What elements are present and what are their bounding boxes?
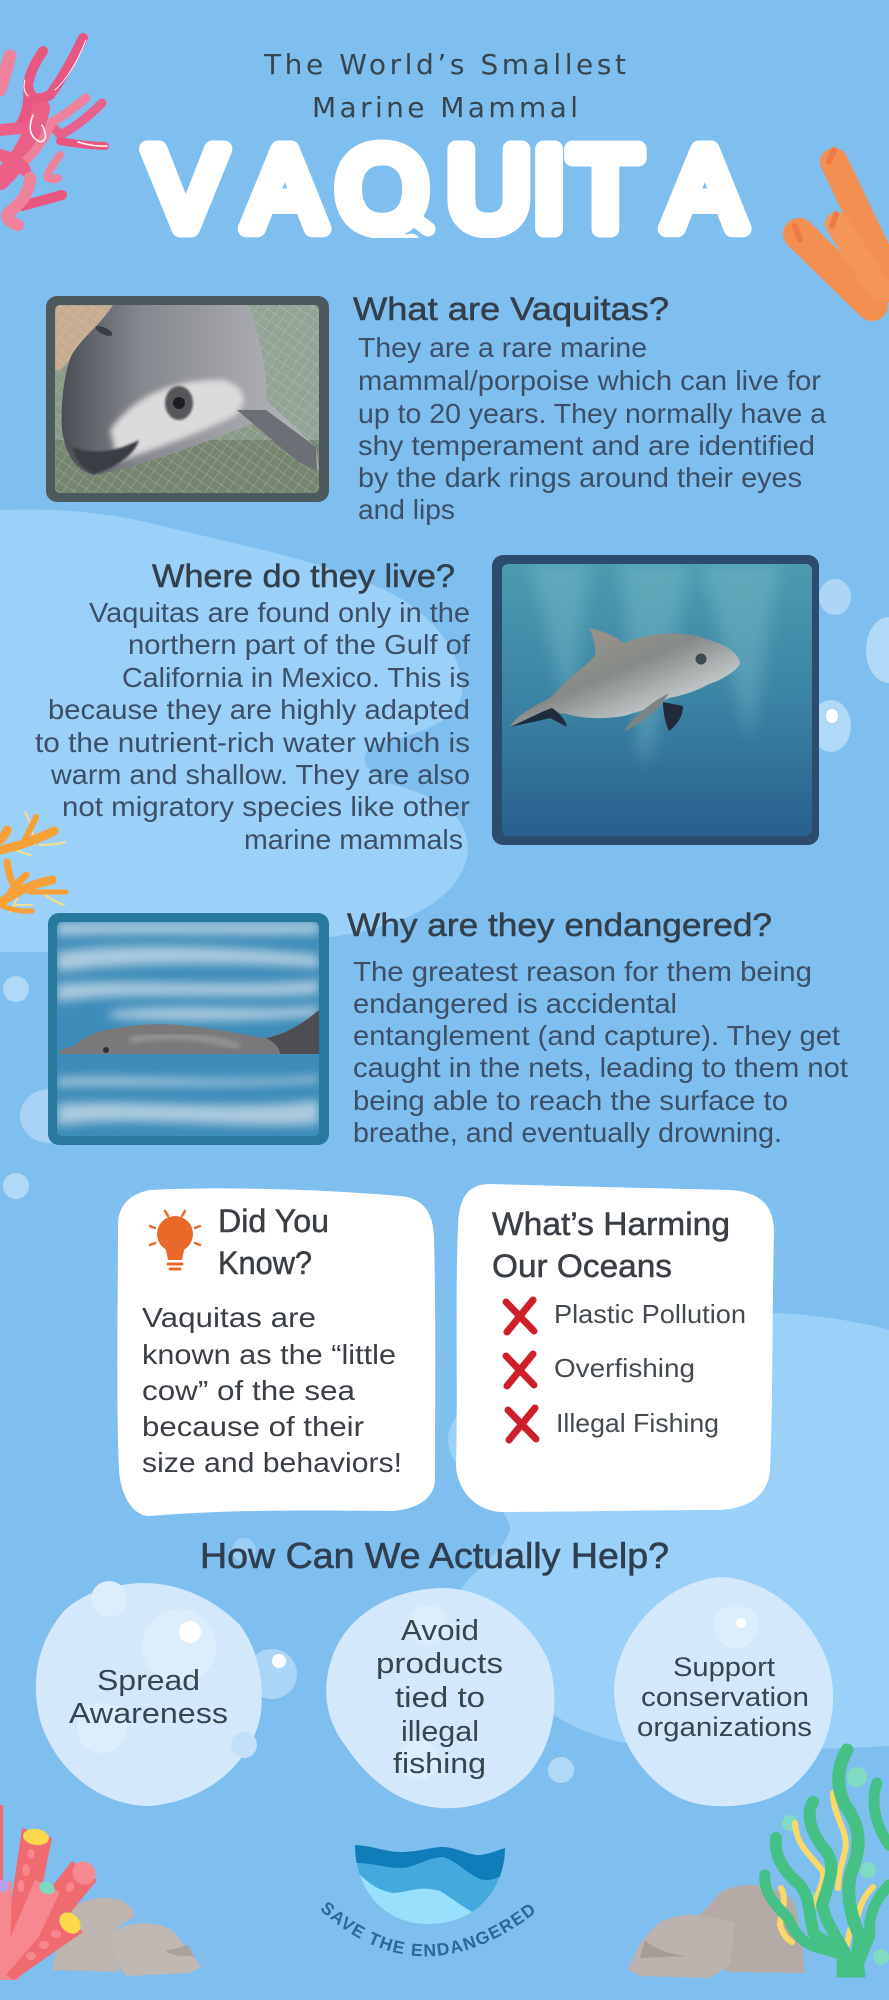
label: products (376, 1648, 503, 1680)
title: The World's Smallest Marine Mammal: Marine Mammal (312, 91, 578, 124)
text: why endangered body: breathe, and eventually drowning. (353, 1117, 782, 1148)
text: little cow fact: Vaquitas are (142, 1302, 316, 1333)
photo: vaquita swimming underwater (492, 555, 819, 845)
list item: Overfishing (506, 1353, 695, 1386)
text: little cow fact: because of their (142, 1411, 364, 1442)
text: why endangered body (353, 956, 848, 1148)
title: The World's Smallest Marine Mammal (263, 48, 626, 124)
circle: Spread Awareness (36, 1581, 262, 1806)
list item: Overfishing: Overfishing (554, 1353, 695, 1383)
text: where do they live body: to the nutrient-rich water which is (35, 727, 470, 758)
text: what are vaquitas body: shy temperament and are identified (358, 430, 815, 461)
photo: vaquita at water surface (48, 913, 329, 1145)
text: why endangered body: caught in the nets, leading to them not (353, 1052, 848, 1083)
label (376, 1615, 503, 1780)
coral: pink top left (0, 38, 107, 225)
text: what are vaquitas body: by the dark rings around their eyes (358, 462, 802, 493)
heading: How Can We Actually Help?: How Can We Actually Help? (200, 1535, 669, 1576)
circle: Support conservation organizations (614, 1577, 833, 1806)
text: where do they live body: northern part of the Gulf of (128, 629, 470, 660)
logo: save the endangered (322, 1845, 534, 1956)
text: where do they live body: not migratory species like other (62, 791, 470, 822)
text: what are vaquitas body: and lips (358, 494, 455, 525)
heading: Did You Know? (218, 1203, 329, 1281)
coral: red bottom left (0, 1805, 100, 1980)
label: Avoid (401, 1615, 479, 1647)
label: Awareness (69, 1698, 228, 1730)
label: Support (673, 1652, 776, 1682)
heading: What's Harming Our Oceans: Our Oceans (492, 1248, 672, 1284)
icon: light bulb (150, 1211, 200, 1269)
heading: What's Harming Our Oceans: What’s Harming (492, 1206, 730, 1242)
heading: Did You Know?: Did You (218, 1203, 329, 1239)
decorative bubbles (3, 579, 889, 1783)
label: Spread (97, 1665, 200, 1697)
list item: Illegal Fishing: Illegal Fishing (556, 1408, 719, 1438)
heading: Why are they endangered?: Why are they endangered? (347, 907, 772, 943)
text: where do they live body: marine mammals (244, 824, 463, 855)
label: illegal (401, 1716, 479, 1748)
title: The World's Smallest Marine Mammal: The World’s Smallest (263, 48, 626, 81)
text: where do they live body (35, 597, 470, 855)
text: little cow fact: size and behaviors! (142, 1447, 402, 1478)
seaweed: bottom right (765, 1750, 889, 1976)
heading: What's Harming Our Oceans (492, 1206, 730, 1284)
list item: Plastic Pollution (506, 1299, 746, 1332)
heading: What are Vaquitas?: What are Vaquitas? (353, 291, 669, 327)
label: fishing (393, 1748, 486, 1780)
circle: Avoid products tied to illegal fishing (326, 1588, 554, 1808)
text: why endangered body: entanglement (and capture). They get (353, 1020, 840, 1051)
text: little cow fact (142, 1302, 402, 1478)
text: why endangered body: The greatest reason for them being (353, 956, 812, 987)
text: where do they live body: California in Mexico. This is (122, 662, 470, 693)
text: why endangered body: endangered is accidental (353, 988, 677, 1019)
text: what are vaquitas body: They are a rare marine (358, 332, 647, 363)
text: little cow fact: known as the “little (142, 1339, 396, 1370)
text: where do they live body: Vaquitas are found only in the (89, 597, 470, 628)
text: why endangered body: being able to reach the surface to (353, 1085, 788, 1116)
text: little cow fact: cow” of the sea (142, 1375, 356, 1406)
photo: vaquita caught in net (46, 296, 329, 502)
text: what are vaquitas body: mammal/porpoise which can live for (358, 365, 821, 396)
title: VAQUITA: VAQUITA (147, 124, 744, 254)
logo: save the endangered: SAVE THE ENDANGERED (322, 1902, 534, 1956)
text: what are vaquitas body: up to 20 years. They normally have a (358, 398, 827, 429)
label (637, 1652, 812, 1742)
list item: Plastic Pollution: Plastic Pollution (554, 1299, 746, 1329)
text: where do they live body: warm and shallow. They are also (50, 759, 470, 790)
rocks: bottom left (52, 1898, 201, 1976)
card: What's Harming Our Oceans (456, 1184, 774, 1512)
card: Did You Know (117, 1188, 435, 1516)
label: tied to (395, 1682, 485, 1714)
label: conservation (641, 1682, 809, 1712)
heading: Did You Know?: Know? (218, 1245, 312, 1281)
rocks: bottom right (628, 1885, 805, 1978)
heading: Where do they live?: Where do they live? (152, 558, 455, 594)
label (69, 1665, 228, 1730)
label: organizations (637, 1712, 812, 1742)
coral: orange left (0, 812, 66, 912)
text: where do they live body: because they are highly adapted (48, 694, 470, 725)
text: what are vaquitas body (358, 332, 827, 525)
coral: orange top right (795, 150, 889, 305)
